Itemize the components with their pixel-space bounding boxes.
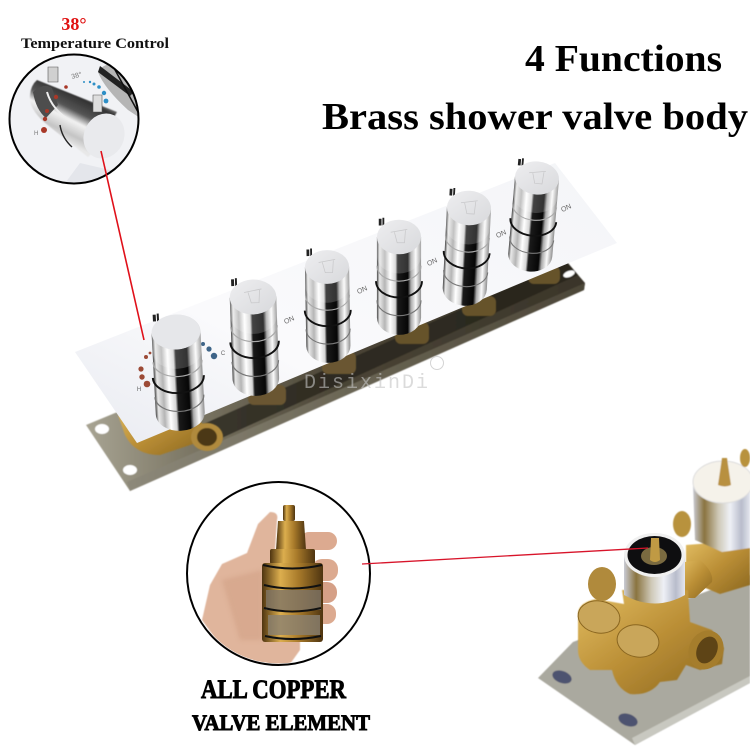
ON labels: ON — [560, 203, 573, 214]
chrome ring — [46, 92, 64, 115]
ON labels: ON — [495, 229, 508, 240]
blue dots — [83, 81, 108, 103]
mounting rail — [86, 262, 585, 491]
knob cylinder — [30, 80, 117, 157]
second valve — [673, 449, 750, 594]
screw caps — [576, 598, 661, 660]
close-up photo — [9, 54, 140, 190]
knob 6 — [506, 158, 562, 273]
red dots — [41, 85, 68, 133]
knob 2 — [228, 277, 281, 397]
palm shading — [222, 570, 262, 640]
knob stud — [48, 67, 58, 82]
brass valve body photo — [538, 449, 750, 745]
callout: temperature control close-up — [9, 54, 140, 190]
close-up photo: H — [34, 131, 38, 137]
knob 4 — [376, 218, 422, 335]
knob 3 — [304, 248, 352, 363]
knob face — [84, 114, 116, 153]
rear collar shadow — [33, 86, 58, 118]
knob 5 — [441, 188, 493, 307]
temperature dots — [137, 342, 226, 393]
brass body under plate — [118, 266, 560, 455]
title: Brass shower valve body: Brass shower valve body — [322, 96, 748, 138]
hand photo — [202, 505, 338, 664]
red leader line: valve element — [362, 548, 648, 564]
watermark: DisixinDi — [304, 372, 428, 395]
temperature dots: H — [137, 387, 141, 393]
ON labels — [283, 203, 573, 326]
callout: valve element in hand — [187, 482, 371, 666]
circle outline — [10, 54, 138, 184]
label: ALL COPPER: ALL COPPER — [201, 675, 346, 704]
ON labels: ON — [426, 257, 439, 268]
label: VALVE ELEMENT: VALVE ELEMENT — [192, 710, 370, 735]
38 degree mark: 38° — [70, 70, 83, 81]
ON labels: ON — [283, 315, 296, 326]
side outlet — [682, 625, 730, 675]
fingers — [304, 532, 338, 624]
base plate — [538, 575, 750, 745]
left outlet — [588, 567, 616, 601]
label: Temperature Control: Temperature Control — [21, 36, 169, 52]
red leader line: temperature knob — [101, 151, 144, 340]
registered mark — [430, 356, 444, 370]
ON labels: ON — [356, 285, 369, 296]
brass valve casting — [578, 590, 724, 694]
front stud — [93, 95, 102, 112]
chrome plate — [75, 163, 617, 443]
knob 1 — [150, 311, 207, 432]
neighbouring knob — [98, 64, 140, 118]
label: 38 degrees: 38° — [61, 14, 87, 34]
valve panel product photo — [75, 158, 617, 491]
circle outline — [187, 482, 370, 665]
title: 4 Functions: 4 Functions — [525, 38, 722, 80]
brass cartridge — [262, 505, 323, 642]
hand — [202, 512, 300, 666]
connecting stub — [680, 560, 712, 598]
chrome cartridge — [624, 533, 685, 604]
temperature dots: C — [221, 351, 226, 357]
